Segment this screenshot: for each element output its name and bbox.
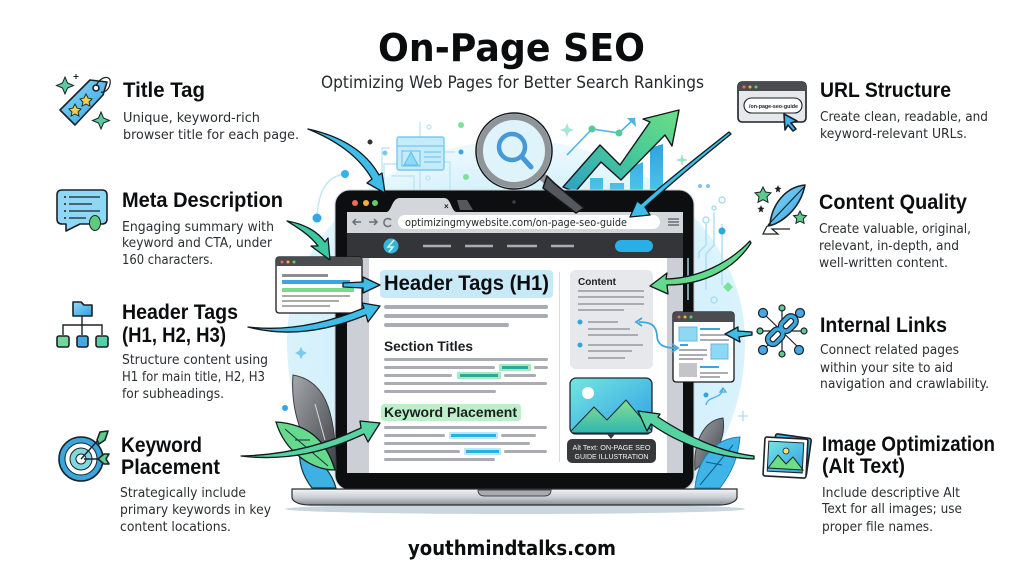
title: On-Page SEO xyxy=(378,26,645,70)
text block: keyword placement: Strategically include xyxy=(120,485,246,501)
alt text tooltip xyxy=(567,439,656,463)
icon: speech bubble xyxy=(57,190,107,231)
laptop: GUIDE ILLUSTRATION xyxy=(574,452,648,461)
text block: meta description xyxy=(122,189,283,268)
text block: header tags xyxy=(122,301,268,402)
text block: title tag: browser title for each page. xyxy=(123,127,299,143)
text block: meta description: Meta Description xyxy=(122,189,283,212)
text block: header tags: for subheadings. xyxy=(122,386,224,402)
text block: header tags: Header Tags xyxy=(122,301,238,324)
text block: header tags: H1 for main title, H2, H3 xyxy=(122,369,265,385)
laptop: Alt Text: ON-PAGE SEO xyxy=(572,443,651,452)
icon: hierarchy xyxy=(57,302,108,347)
text block: url structure: Create clean, readable, and xyxy=(820,109,988,125)
text block: url structure: URL Structure xyxy=(820,79,951,102)
laptop: Keyword Placement xyxy=(384,405,518,420)
content panel xyxy=(570,270,653,369)
text block: image optimization: Include descriptive Alt xyxy=(822,485,960,501)
icon: picture xyxy=(763,434,811,478)
address text: optimizingmywebsite.com/on-page-seo-guide xyxy=(405,217,627,229)
text block: image optimization: proper file names. xyxy=(822,519,933,535)
arrow: title tag xyxy=(308,129,385,193)
arrow: keyword placement xyxy=(241,421,380,458)
text block: internal links xyxy=(820,314,989,392)
text block: title tag: Unique, keyword-rich xyxy=(123,110,260,126)
tab close mark: × xyxy=(444,202,449,211)
icon: url window: /on-page-seo-guide xyxy=(749,104,799,110)
text block: url structure: keyword-relevant URLs. xyxy=(820,126,967,142)
text block: title tag: Title Tag xyxy=(123,79,205,102)
web page diagram xyxy=(397,137,444,170)
laptop xyxy=(285,190,745,514)
text block: content quality: relevant, in-depth, and xyxy=(819,238,959,254)
text block: image optimization: Text for all images; use xyxy=(821,501,962,517)
text block: meta description: 160 characters. xyxy=(122,252,213,268)
leaves right xyxy=(695,388,748,488)
circuit decoration: right xyxy=(677,155,733,303)
text block: url structure xyxy=(820,79,988,142)
footer url: youthmindtalks.com xyxy=(408,536,616,560)
subtitle: Optimizing Web Pages for Better Search Rankings xyxy=(321,73,704,92)
icon: tag xyxy=(56,74,110,129)
text block: content quality: Create valuable, original, xyxy=(819,221,971,237)
text block: keyword placement: primary keywords in key xyxy=(120,502,271,518)
laptop: Content xyxy=(578,276,616,288)
text block: internal links: Internal Links xyxy=(820,314,947,337)
arrow: panel link xyxy=(636,318,678,352)
section titles: Section Titles xyxy=(384,339,473,354)
text block: keyword placement: Keyword xyxy=(121,434,202,457)
text block: internal links: navigation and crawlability. xyxy=(820,376,989,392)
arrow: meta window to H1 xyxy=(343,277,380,293)
laptop: Header Tags (H1) xyxy=(384,272,549,295)
keyword placement xyxy=(381,404,521,421)
growth chart xyxy=(560,110,687,192)
text block: content quality: well-written content. xyxy=(819,255,948,271)
panel: meta snippet window xyxy=(276,257,362,313)
icon: url window xyxy=(738,82,806,131)
text block: keyword placement: Placement xyxy=(121,456,220,479)
arrow: url structure xyxy=(630,132,731,217)
panel: internal links window xyxy=(673,312,734,382)
text block: content quality xyxy=(819,191,971,271)
magnifying glass xyxy=(476,113,584,213)
text block: image optimization xyxy=(821,433,995,535)
text block: internal links: within your site to aid xyxy=(820,360,953,376)
text block: title tag xyxy=(123,79,299,143)
arrow: content quality xyxy=(650,241,751,294)
arrow: internal links xyxy=(725,327,752,342)
browser controls xyxy=(353,218,679,226)
text block: image optimization: (Alt Text) xyxy=(822,455,905,478)
text block: internal links: Connect related pages xyxy=(820,342,959,358)
text block: meta description: keyword and CTA, under xyxy=(122,235,272,251)
H1 heading xyxy=(380,270,553,298)
image thumbnail xyxy=(570,378,652,434)
background blob xyxy=(287,140,745,488)
text block: keyword placement xyxy=(120,434,271,535)
body lines xyxy=(384,305,548,327)
arrow: image optimization xyxy=(638,411,754,459)
icon: link network xyxy=(757,305,807,357)
leaves left xyxy=(276,347,336,488)
arrow: header tags xyxy=(248,303,380,332)
arrow: meta description xyxy=(287,221,330,260)
icon: target xyxy=(59,431,109,481)
text block: content quality: Content Quality xyxy=(819,191,967,214)
text block: image optimization: Image Optimization xyxy=(822,433,995,456)
circuit decoration: top left xyxy=(312,122,469,222)
text block: header tags: Structure content using xyxy=(122,352,268,368)
text block: meta description: Engaging summary with xyxy=(122,219,274,235)
icon: feather xyxy=(755,185,806,234)
text block: keyword placement: content locations. xyxy=(120,519,231,535)
text block: header tags: (H1, H2, H3) xyxy=(122,324,226,347)
